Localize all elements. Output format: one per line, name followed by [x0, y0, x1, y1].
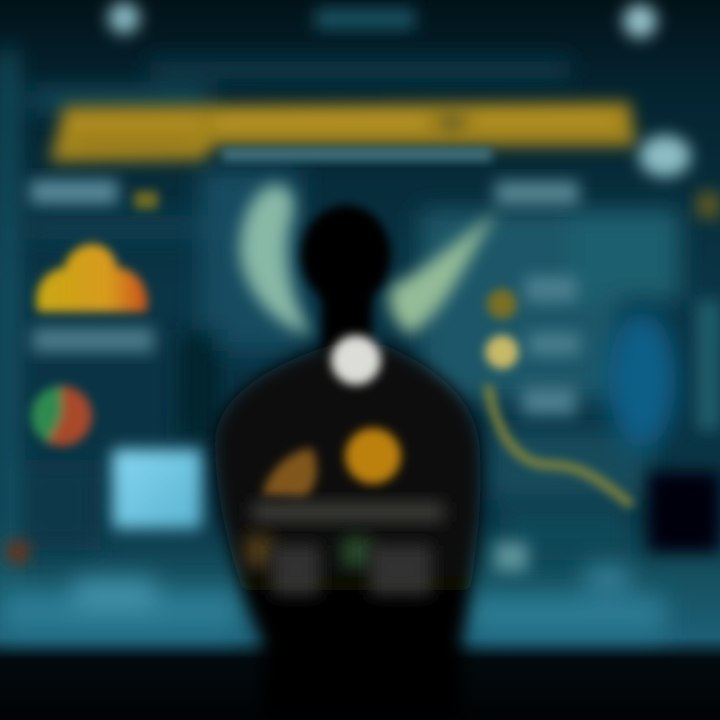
panel: background mottling [0, 50, 680, 590]
icon: cloud [36, 244, 148, 312]
text block one [525, 276, 577, 302]
silhouette figure [215, 205, 481, 720]
icon: small gold mark [134, 191, 158, 209]
icon: large orange circle [345, 428, 401, 484]
text block under cloud [32, 328, 154, 352]
text block two [528, 333, 580, 355]
dark block at right [648, 472, 720, 552]
neck [322, 290, 372, 360]
icon: gold badge [487, 289, 517, 319]
small label below curve [494, 542, 528, 572]
text block three [522, 387, 576, 415]
icon: top right circle [623, 4, 657, 38]
top decorations [108, 2, 657, 38]
text block: left column [272, 545, 320, 595]
text block: right column [370, 545, 432, 595]
icon: blue figure [608, 312, 676, 448]
icon: red dot [6, 540, 30, 564]
panel: left column [6, 180, 202, 564]
text block: chest heading [252, 502, 444, 522]
subtitle [222, 148, 492, 161]
icon: upper right circle [639, 135, 691, 177]
right wing shape [389, 212, 498, 335]
top centre label [315, 8, 415, 30]
icon: dim green mark [342, 537, 372, 567]
panel: right list [485, 181, 632, 572]
upper right label [495, 181, 579, 205]
torso [215, 345, 481, 720]
icon: far right gold mark [697, 192, 720, 218]
left heading [30, 180, 118, 204]
icon: small orange shape [262, 448, 317, 497]
icon: pie chart [31, 386, 92, 446]
panel: light blue card [112, 449, 202, 529]
head [301, 205, 391, 305]
bottom band highlights [0, 565, 665, 635]
right edge teal panel [697, 300, 720, 430]
icon: pale yellow badge [485, 335, 519, 369]
left wing shape [240, 185, 312, 335]
line chart curve [488, 385, 632, 505]
icon: top left circle [108, 2, 140, 34]
icon: dim orange mark [245, 535, 273, 567]
title [50, 102, 636, 162]
icon: white badge on chest [331, 335, 381, 385]
